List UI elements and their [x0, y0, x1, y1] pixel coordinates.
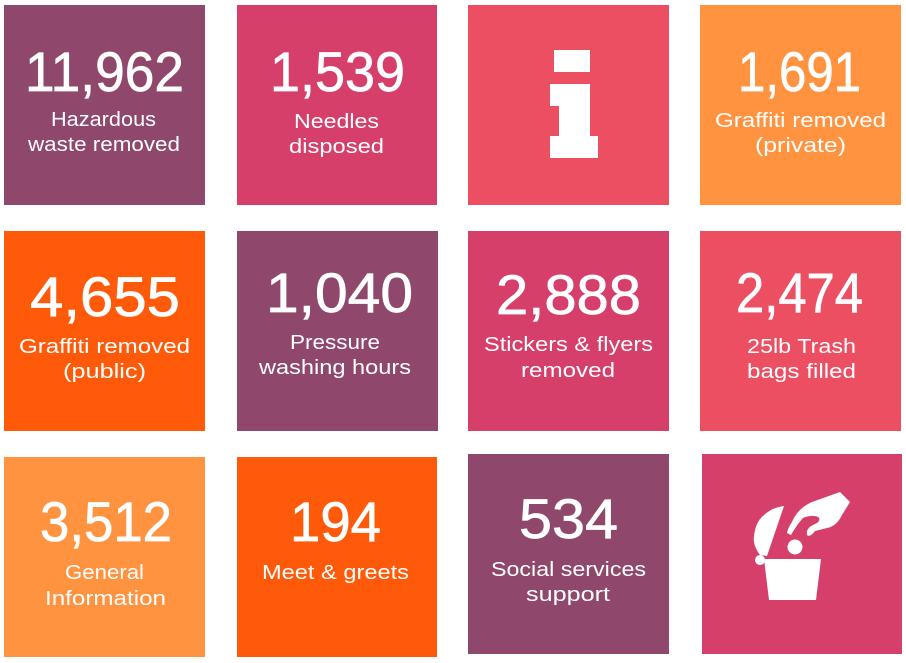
label: graffiti removed public: Graffiti removed [19, 336, 190, 358]
label: graffiti removed public: (public) [63, 361, 146, 383]
panel: social services [468, 454, 669, 654]
number: 534: 534 [519, 487, 618, 550]
label: needles disposed [289, 111, 384, 158]
panel: information icon [468, 5, 669, 205]
number: 1,539: 1,539 [270, 40, 405, 103]
number: 194: 194 [290, 490, 381, 553]
icon: letter i [550, 50, 598, 158]
label: 25lb trash bags filled: 25lb Trash [747, 336, 856, 358]
label: social services support [491, 559, 646, 606]
label: needles disposed: Needles [294, 111, 379, 133]
panel: hazardous waste [4, 5, 205, 205]
number: 11,962: 11,962 [25, 40, 184, 103]
label: graffiti removed private: (private) [755, 135, 846, 157]
label: meet and greets: Meet & greets [262, 562, 409, 584]
label: pressure washing hours [258, 332, 411, 379]
label: hazardous waste removed [27, 109, 180, 156]
label: graffiti removed public [19, 336, 190, 383]
label: general information [45, 562, 166, 610]
panel: graffiti public [4, 231, 205, 431]
label: stickers and flyers removed: Stickers & flyers [484, 334, 653, 356]
label: graffiti removed private [715, 110, 886, 157]
panel: pressure washing [237, 231, 438, 431]
number: 2,888: 2,888 [496, 263, 641, 326]
label: stickers and flyers removed: removed [521, 360, 615, 382]
icon: hand dropping litter in bin [754, 492, 850, 600]
panel: trash can icon [702, 454, 902, 654]
label: stickers and flyers removed [484, 334, 653, 382]
label: general information: General [65, 562, 144, 584]
number: 4,655: 4,655 [30, 265, 180, 328]
label: graffiti removed private: Graffiti removed [715, 110, 886, 132]
number: 1,691: 1,691 [738, 40, 861, 103]
label: 25lb trash bags filled [747, 336, 856, 383]
panel: graffiti private [700, 5, 901, 205]
label: hazardous waste removed: waste removed [27, 134, 180, 156]
panel: meet and greets [237, 457, 437, 657]
label: social services support: Social services [491, 559, 646, 581]
label: hazardous waste removed: Hazardous [51, 109, 156, 131]
label: social services support: support [526, 584, 611, 606]
number: 2,474: 2,474 [736, 261, 863, 324]
label: pressure washing hours: Pressure [290, 332, 380, 354]
panel: general information [4, 457, 205, 657]
number: 1,040: 1,040 [266, 261, 413, 324]
panel: trash bags [700, 231, 901, 431]
label: 25lb trash bags filled: bags filled [747, 361, 856, 383]
number: 3,512: 3,512 [40, 490, 172, 553]
panel: needles [237, 5, 437, 205]
label: pressure washing hours: washing hours [258, 357, 411, 379]
panel: stickers and flyers [468, 231, 669, 431]
label: needles disposed: disposed [289, 136, 384, 158]
label: general information: Information [45, 588, 166, 610]
